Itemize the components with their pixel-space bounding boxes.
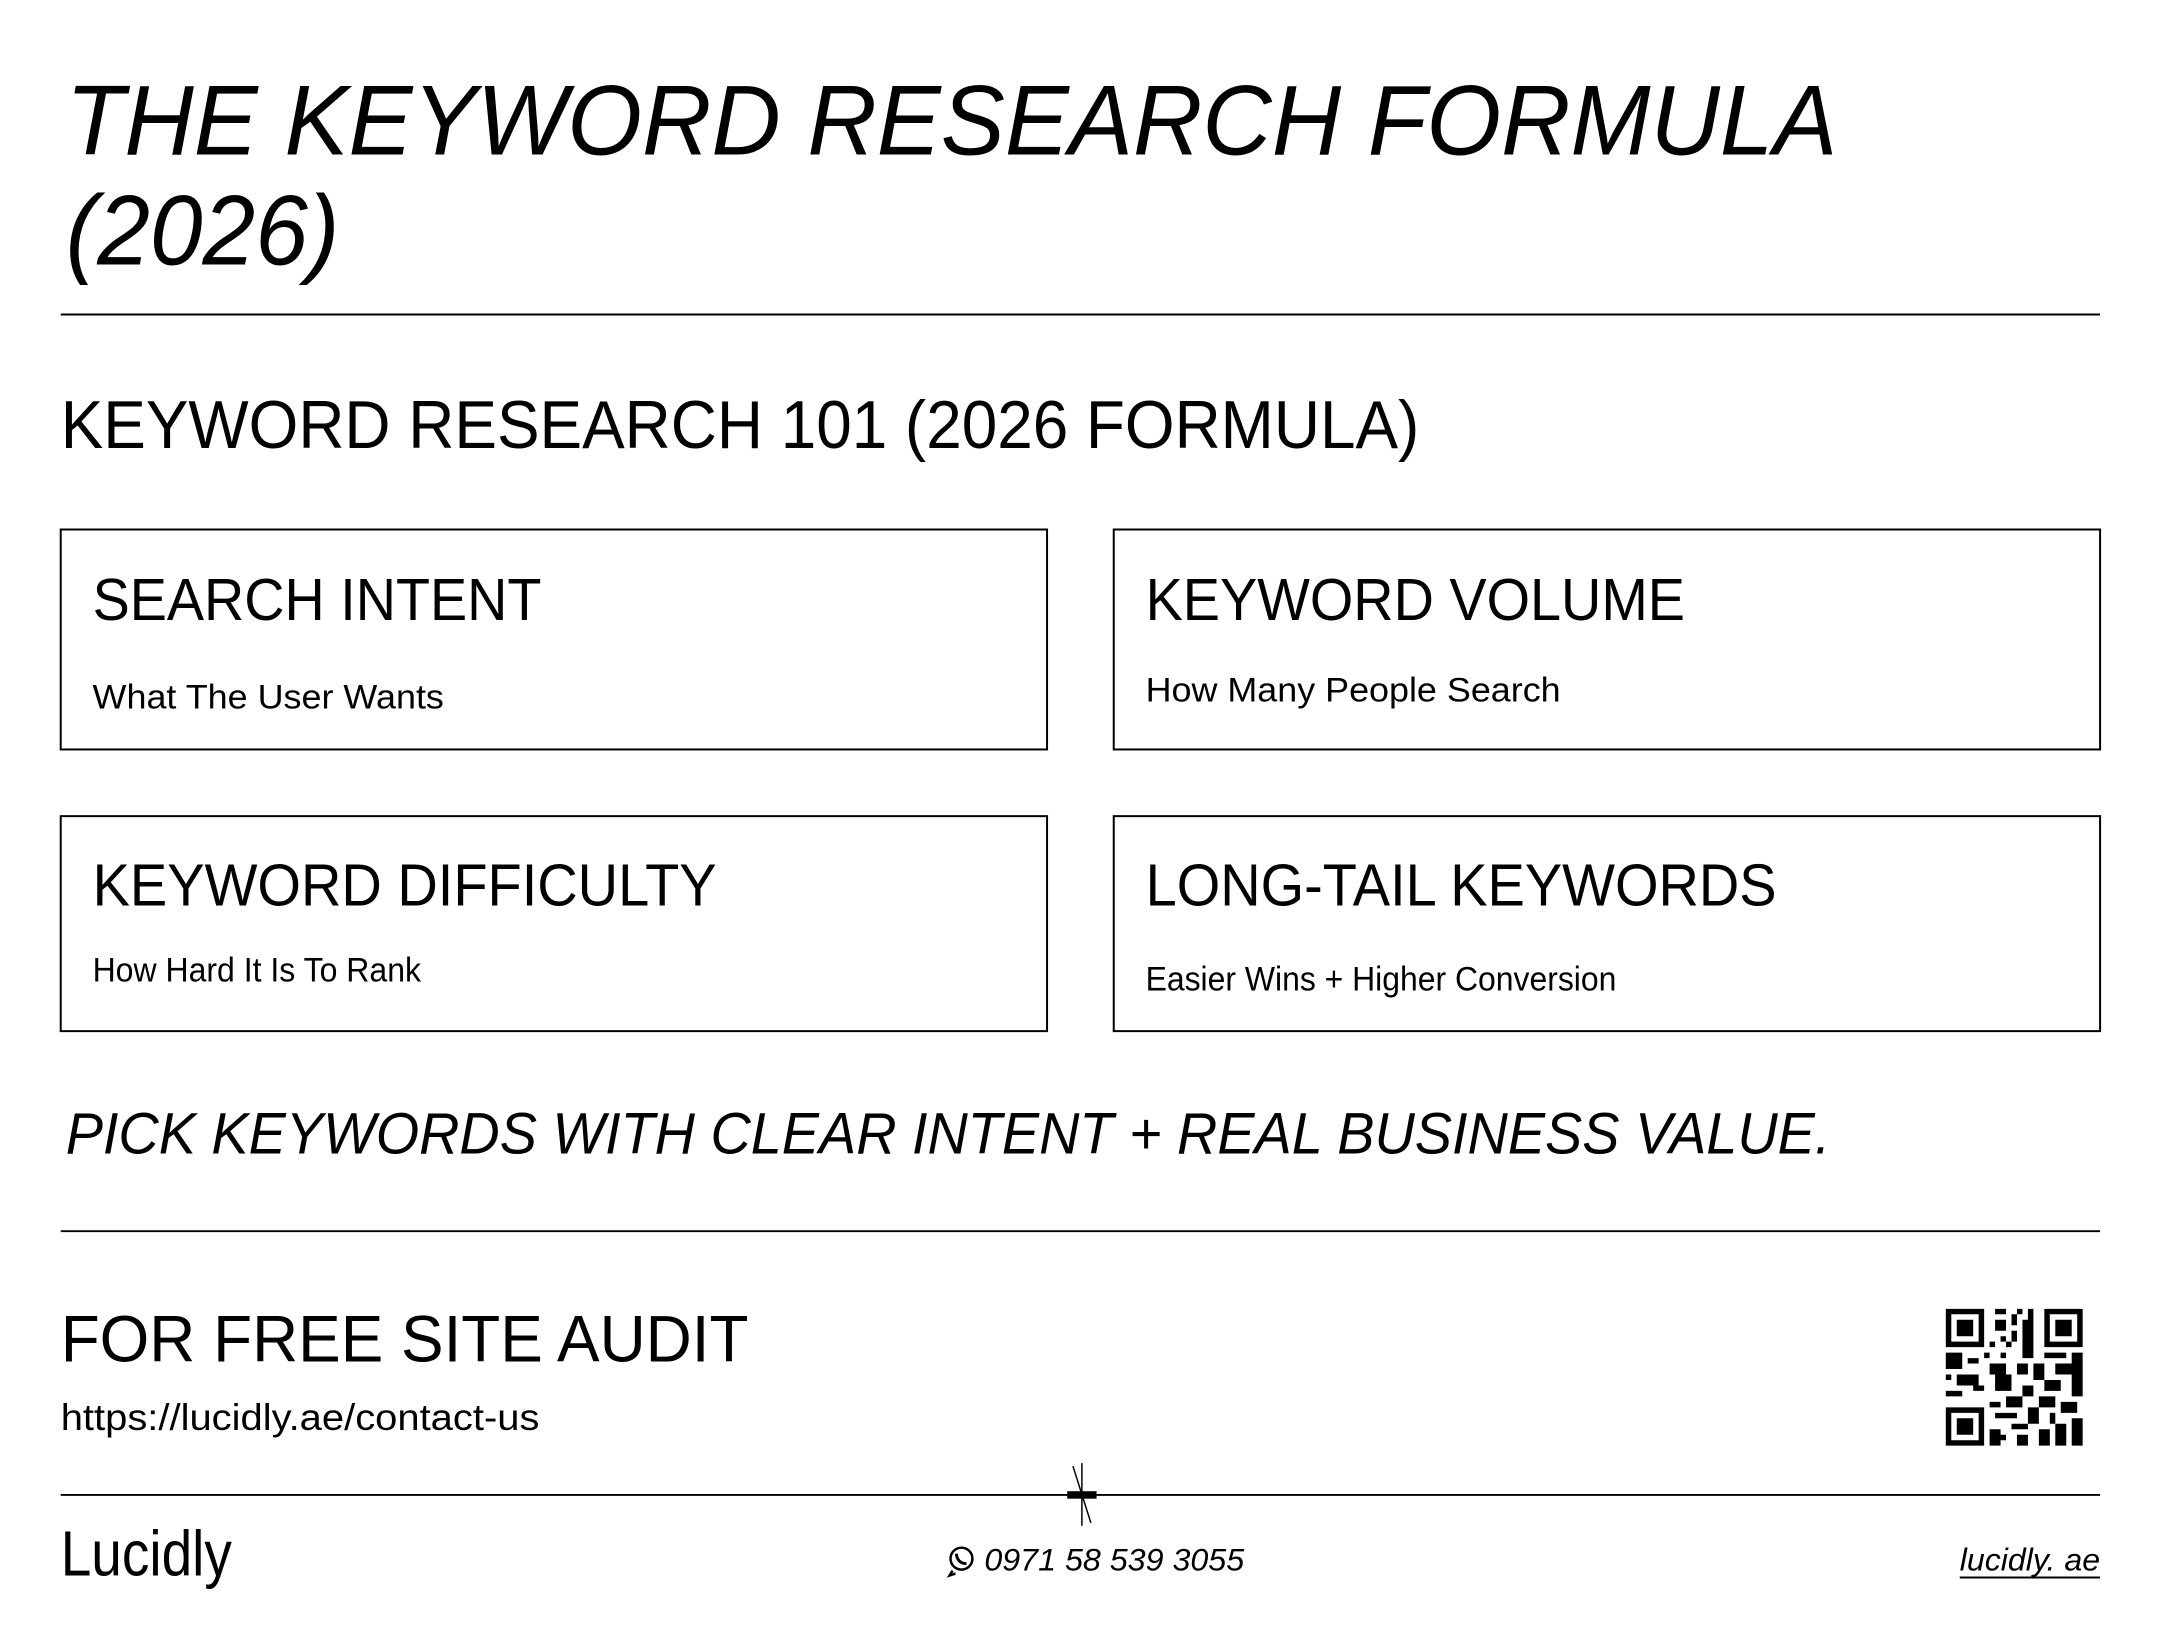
title: (2026) bbox=[66, 176, 339, 287]
heading: keyword volume: KEYWORD VOLUME bbox=[1146, 566, 1685, 633]
title bbox=[66, 65, 1837, 287]
cta url: https://lucidly.ae/contact-us bbox=[61, 1397, 539, 1438]
section heading: KEYWORD RESEARCH 101 (2026 FORMULA) bbox=[61, 388, 1419, 463]
title: THE KEYWORD RESEARCH FORMULA bbox=[66, 65, 1837, 176]
panel: search intent bbox=[61, 529, 1047, 749]
heading: search intent: SEARCH INTENT bbox=[93, 566, 541, 633]
panel: keyword difficulty bbox=[61, 816, 1047, 1031]
callout: key takeaway: PICK KEYWORDS WITH CLEAR INTENT + REAL BUSINESS VALUE. bbox=[66, 1102, 1830, 1167]
cta heading: FOR FREE SITE AUDIT bbox=[61, 1303, 748, 1376]
text: what the user wants: What The User Wants bbox=[93, 679, 444, 717]
text: easier wins: Easier Wins + Higher Conversion bbox=[1146, 960, 1616, 998]
panel: long-tail keywords bbox=[1114, 816, 2100, 1031]
text: how many people search: How Many People Search bbox=[1146, 672, 1561, 710]
heading: keyword difficulty: KEYWORD DIFFICULTY bbox=[93, 852, 717, 919]
text: how hard it is to rank: How Hard It Is To Rank bbox=[93, 951, 421, 989]
icon: sparkle mark bbox=[1068, 1463, 1096, 1526]
heading: long-tail keywords: LONG-TAIL KEYWORDS bbox=[1146, 852, 1777, 919]
contact: whatsapp phone: 0971 58 539 3055 bbox=[984, 1542, 1244, 1578]
icon: whatsapp bbox=[950, 1548, 972, 1576]
panel: keyword volume bbox=[1114, 529, 2100, 749]
footer link: lucidly. ae bbox=[1960, 1542, 2100, 1578]
logo: lucidly: Lucidly bbox=[61, 1519, 232, 1590]
icon: qr code bbox=[1946, 1309, 2083, 1446]
